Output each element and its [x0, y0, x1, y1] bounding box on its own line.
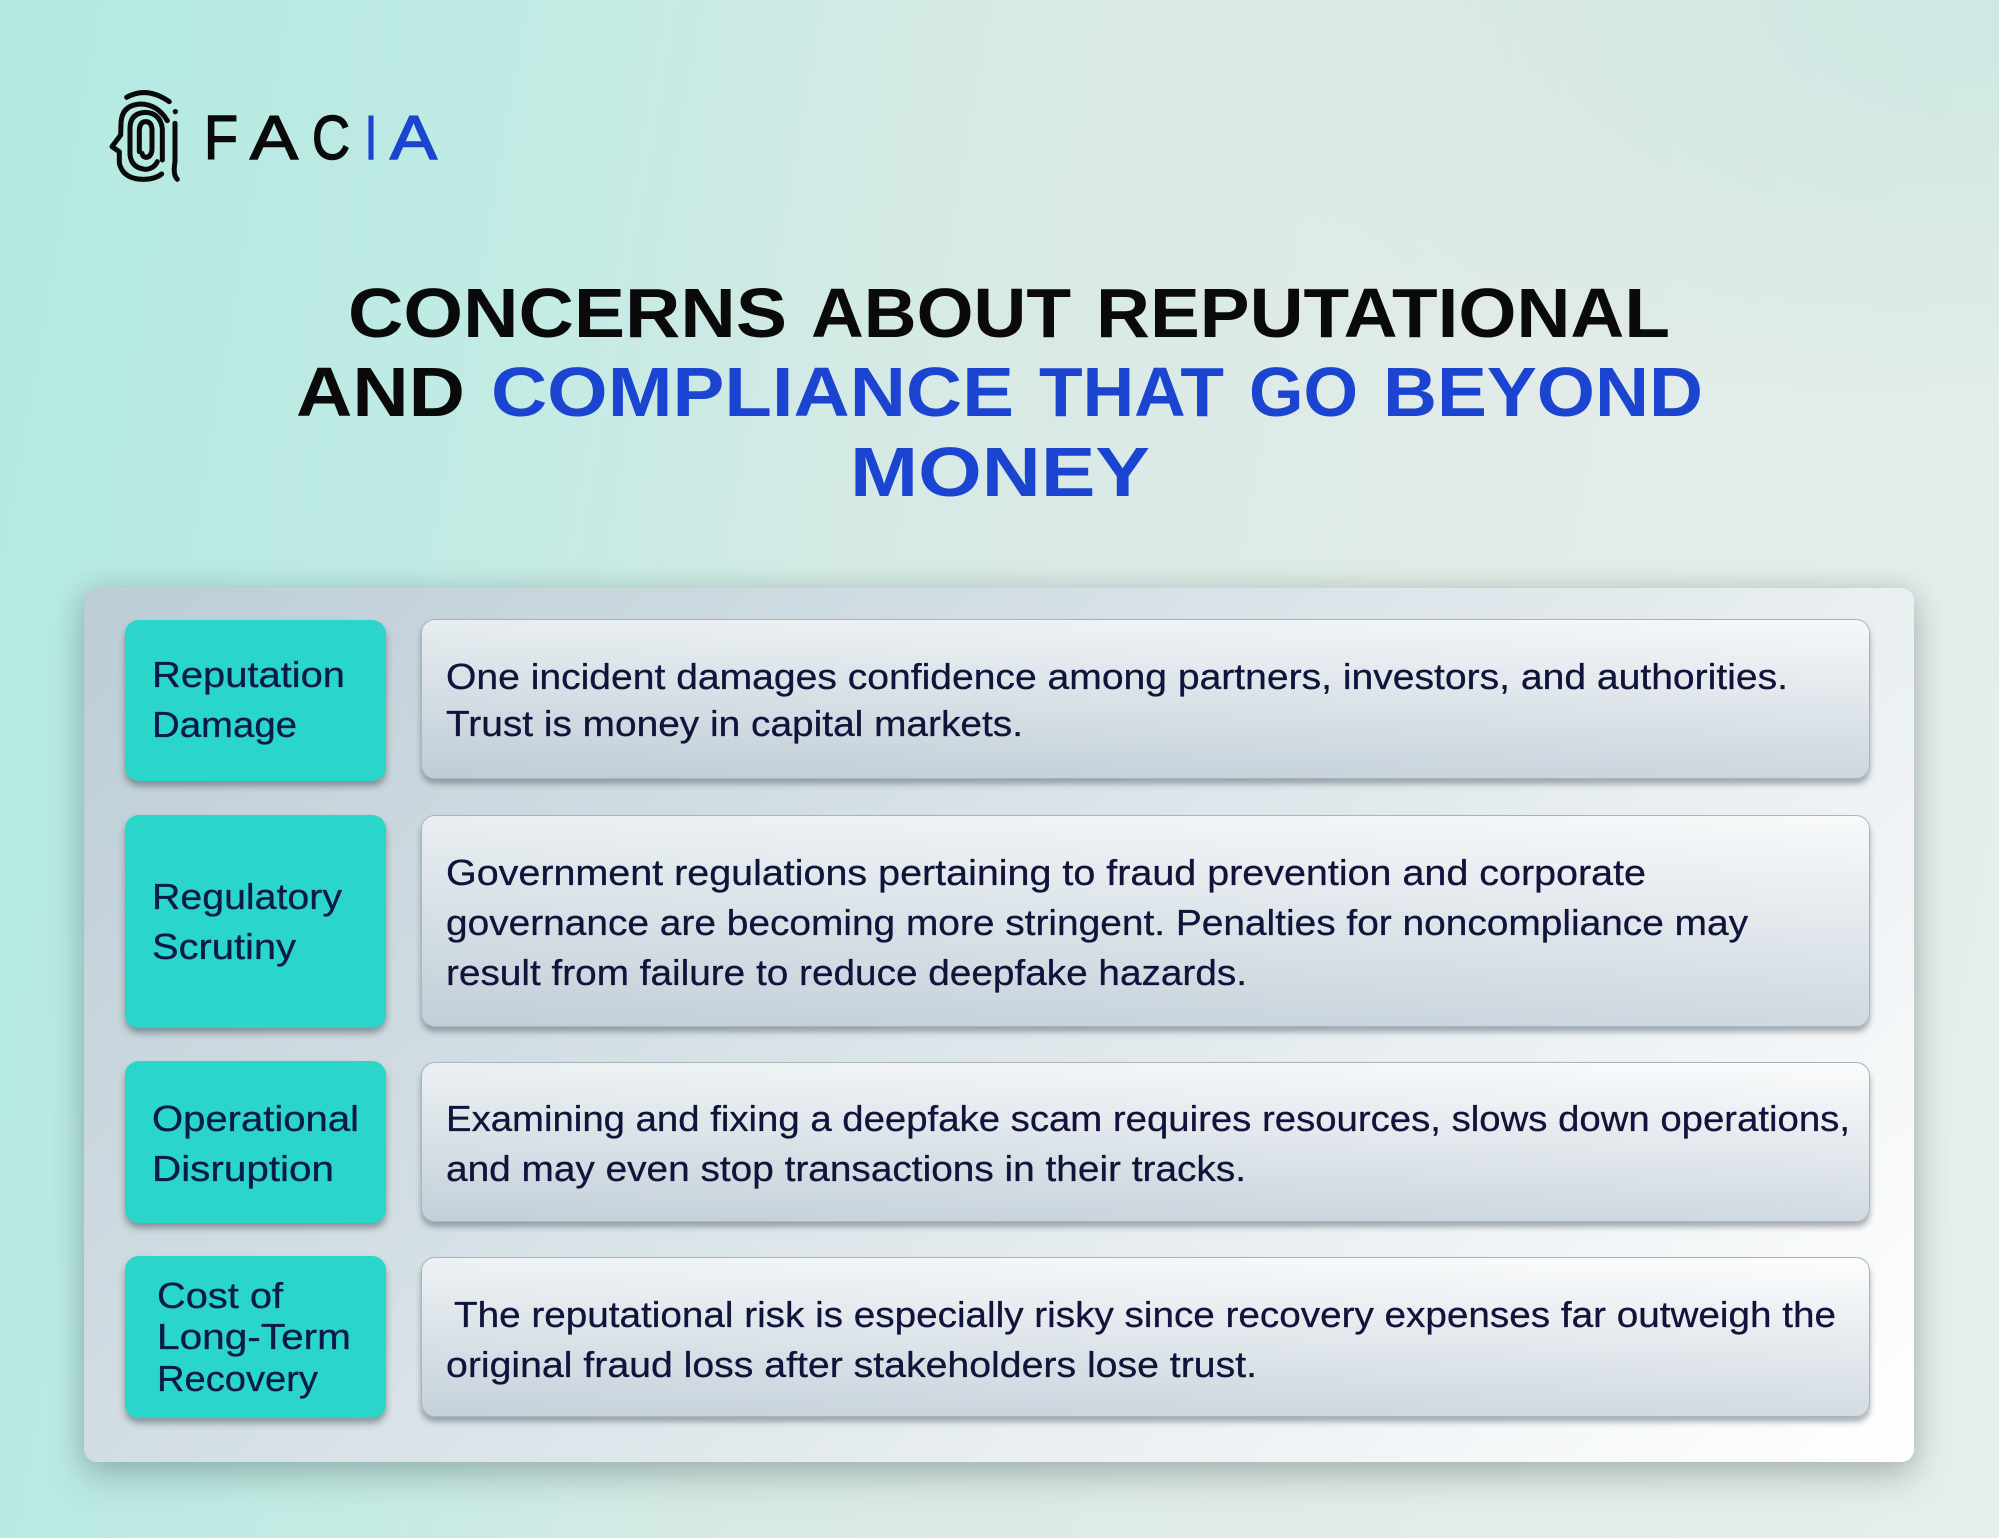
description text: Reputation Damage: One incident damages confidence among partners, investors, and authorities. [446, 656, 1788, 697]
description text: Cost of Long-Term Recovery: The reputational risk is especially risky since recovery expenses far outweigh the [454, 1294, 1836, 1335]
tag: Regulatory Scrutiny [125, 815, 386, 1028]
logo wordmark: F [204, 104, 238, 173]
label text: Regulatory Scrutiny: Scrutiny [152, 926, 296, 967]
label text: Cost of Long-Term Recovery: Cost of [157, 1275, 284, 1316]
title: THAT [1039, 353, 1224, 431]
label text: Reputation Damage: Damage [152, 704, 297, 745]
description text: Operational Disruption: Examining and fixing a deepfake scam requires resources, slows down operations, [446, 1098, 1850, 1139]
logo wordmark: A [250, 104, 299, 173]
tag: Operational Disruption [125, 1061, 386, 1223]
description text: Regulatory Scrutiny [446, 852, 1748, 993]
title: MONEY [850, 433, 1150, 511]
label text: Cost of Long-Term Recovery [157, 1275, 351, 1399]
description text: Cost of Long-Term Recovery: original fraud loss after stakeholders lose trust. [446, 1344, 1257, 1385]
logo wordmark: A [390, 104, 438, 173]
description text: Cost of Long-Term Recovery [446, 1294, 1836, 1385]
description: Operational Disruption [421, 1062, 1870, 1222]
description text: Reputation Damage [446, 656, 1788, 744]
description: Cost of Long-Term Recovery [421, 1257, 1870, 1417]
description text: Regulatory Scrutiny: governance are becoming more stringent. Penalties for noncompliance may [446, 902, 1748, 943]
title: AND [296, 353, 465, 431]
tag: Reputation Damage [125, 620, 386, 781]
description text: Operational Disruption: and may even stop transactions in their tracks. [446, 1148, 1246, 1189]
label text: Reputation Damage [152, 654, 345, 745]
description text: Reputation Damage: Trust is money in capital markets. [446, 703, 1023, 744]
title: COMPLIANCE [491, 353, 1014, 431]
description: Reputation Damage [421, 619, 1870, 779]
icon: fingerprint head [112, 93, 178, 179]
label text: Regulatory Scrutiny [152, 876, 342, 967]
title: GO [1249, 353, 1358, 431]
description text: Regulatory Scrutiny: result from failure to reduce deepfake hazards. [446, 952, 1247, 993]
logo wordmark [204, 104, 438, 173]
title: ABOUT [811, 274, 1071, 352]
label text: Cost of Long-Term Recovery: Long-Term [157, 1316, 351, 1357]
logo wordmark: C [312, 104, 350, 173]
tag: Cost of Long-Term Recovery [125, 1256, 386, 1418]
description: Regulatory Scrutiny [421, 815, 1870, 1027]
title: CONCERNS [348, 274, 787, 352]
label text: Operational Disruption: Disruption [152, 1148, 334, 1189]
description text: Operational Disruption [446, 1098, 1850, 1189]
label text: Regulatory Scrutiny: Regulatory [152, 876, 342, 917]
label text: Operational Disruption: Operational [152, 1098, 359, 1139]
logo wordmark: I [365, 104, 377, 173]
description text: Regulatory Scrutiny: Government regulations pertaining to fraud prevention and corporate [446, 852, 1646, 893]
label text: Cost of Long-Term Recovery: Recovery [157, 1358, 318, 1399]
title: BEYOND [1383, 353, 1703, 431]
label text: Reputation Damage: Reputation [152, 654, 345, 695]
title: REPUTATIONAL [1096, 274, 1670, 352]
label text: Operational Disruption [152, 1098, 359, 1189]
panel: comparison table [84, 588, 1914, 1462]
